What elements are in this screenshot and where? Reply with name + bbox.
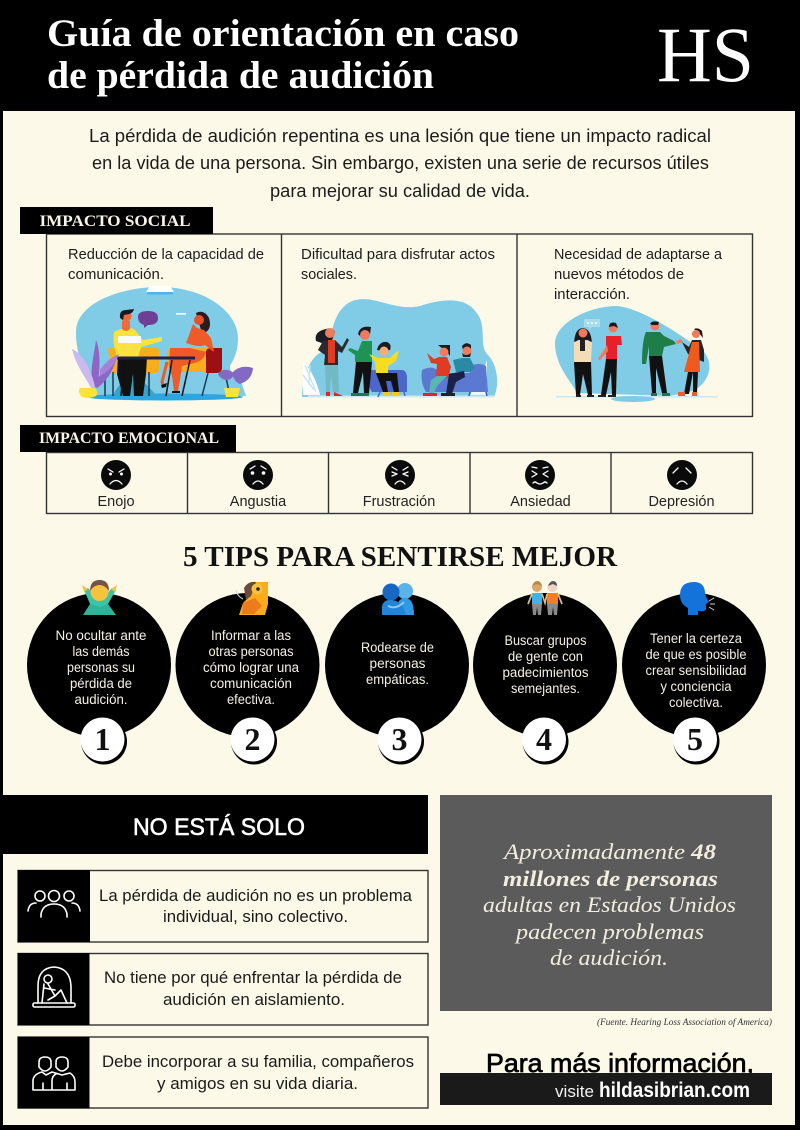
tip 2 [176, 582, 320, 764]
number 5: 5 [687, 721, 703, 757]
number 4 [522, 718, 568, 764]
text: actos sociales: Dificultad para disfrutar actos [301, 247, 495, 263]
illustration: people talking [555, 306, 718, 402]
emotion: angustia [230, 460, 287, 510]
icon: person signing [236, 582, 268, 615]
row: familia y amigos: y amigos en su vida diaria. [157, 1075, 358, 1093]
icon: person at window [33, 967, 75, 1007]
tip 4 [473, 581, 617, 764]
tip 1: personas su [67, 660, 135, 675]
icon: group of people [28, 890, 80, 917]
emotion: ansiedad [510, 460, 571, 510]
heading: impacto social [20, 207, 213, 234]
text: nuevos métodos [554, 247, 723, 303]
emotion: angustia: Angustia [230, 494, 287, 510]
icon: speaking head [680, 582, 715, 615]
text: actos sociales [301, 247, 495, 283]
tip 4: padecimientos [502, 665, 589, 680]
illustration: conversation at table [72, 286, 253, 400]
tip 5: de que es posible [646, 647, 746, 662]
tip 5: crear sensibilidad [646, 663, 746, 678]
tip 2: cómo lograr una [203, 660, 299, 675]
tip 5: colectiva. [669, 695, 723, 710]
row: problema colectivo [18, 870, 428, 942]
tip 1: pérdida de [70, 676, 132, 691]
text: comunicación: comunicación. [68, 267, 164, 283]
row: familia y amigos [18, 1037, 428, 1108]
call to action: Para más información, [486, 1048, 754, 1078]
number 5 [673, 718, 720, 764]
panel: statistic [440, 795, 772, 1011]
tip 2: otras personas [208, 644, 294, 659]
panel: impacto social [20, 207, 752, 416]
call to action: visite [555, 1082, 594, 1101]
title: de pérdida de audición [47, 54, 434, 97]
intro text: La pérdida de audición repentina es una lesión que tiene un impacto radical [89, 125, 711, 146]
icon: two people [33, 1057, 75, 1090]
text: nuevos métodos: nuevos métodos de [554, 267, 684, 283]
call to action: hildasibrian.com [599, 1079, 750, 1102]
panel: statistic: padecen problemas [514, 919, 704, 944]
row: problema colectivo: La pérdida de audición no es un problema [99, 887, 413, 905]
number 1 [80, 718, 127, 764]
tip 3: personas [370, 656, 426, 671]
tip 3: Rodearse de [361, 640, 434, 655]
panel: statistic: Aproximadamente 48 [502, 839, 716, 864]
tip 1 [27, 580, 171, 764]
text: comunicación [68, 247, 264, 283]
icon: people hugging [382, 583, 414, 615]
text: actos sociales: sociales. [301, 267, 357, 283]
text: nuevos métodos: Necesidad de adaptarse a [554, 247, 723, 263]
panel: impacto emocional [20, 425, 752, 514]
call to action [440, 1048, 772, 1105]
row: aislamiento: audición en aislamiento. [163, 991, 345, 1009]
number 3 [378, 718, 424, 764]
tip 5 [622, 582, 766, 764]
icon: person crossing arms [82, 580, 117, 615]
header [47, 11, 754, 98]
logo HS: HS [657, 11, 754, 98]
tip 3 [325, 583, 469, 764]
heading: no está solo [0, 795, 428, 854]
tip 1: las demás [72, 644, 130, 659]
row: aislamiento: No tiene por qué enfrentar la pérdida de [104, 969, 402, 987]
panel: tips [27, 580, 766, 764]
number 1: 1 [94, 721, 110, 757]
tip 3: empáticas. [366, 672, 429, 687]
impacto social table [46, 234, 752, 416]
tip 2: Informar a las [211, 628, 291, 643]
emotion: depresión [648, 460, 715, 510]
emotion: enojo [97, 460, 135, 510]
icon: two people holding hands [528, 581, 562, 615]
emotion: depresión: Depresión [648, 494, 715, 510]
intro text [89, 125, 711, 201]
text: nuevos métodos: interacción. [554, 287, 630, 303]
number 2 [230, 718, 277, 764]
tip 4: semejantes. [511, 681, 580, 696]
number 2: 2 [244, 721, 260, 757]
intro text: para mejorar su calidad de vida. [270, 180, 530, 201]
impacto emocional table [46, 452, 752, 514]
number 3: 3 [392, 721, 408, 757]
intro text: en la vida de una persona. Sin embargo, existen una serie de recursos útiles [92, 152, 709, 173]
row: problema colectivo: individual, sino colectivo. [163, 908, 348, 926]
heading: impacto emocional [20, 425, 236, 452]
tip 2: comunicación [210, 676, 292, 691]
panel: statistic: adultas en Estados Unidos [483, 892, 736, 917]
tip 5: y conciencia [660, 679, 732, 694]
tip 2: efectiva. [227, 692, 275, 707]
panel: statistic: de audición. [550, 945, 668, 970]
tip 1: No ocultar ante [56, 628, 146, 643]
heading: impacto emocional: IMPACTO EMOCIONAL [39, 430, 219, 447]
heading: 5 tips: 5 TIPS PARA SENTIRSE MEJOR [183, 542, 618, 573]
number 4: 4 [536, 721, 552, 757]
text: comunicación: Reducción de la capacidad de [68, 247, 264, 263]
panel: statistic: millones de personas [503, 866, 718, 891]
emotion: enojo: Enojo [97, 494, 135, 510]
row: familia y amigos: Debe incorporar a su familia, compañeros [102, 1053, 414, 1071]
heading: no está solo: NO ESTÁ SOLO [133, 814, 305, 841]
emotion: frustración: Frustración [363, 494, 435, 510]
tip 1: audición. [74, 692, 128, 707]
source note: (Fuente. Hearing Loss Association of America) [597, 1017, 772, 1027]
title: Guía de orientación en caso [47, 12, 519, 55]
title [47, 12, 519, 97]
tip 4: de gente con [508, 649, 583, 664]
emotion: ansiedad: Ansiedad [510, 494, 571, 510]
illustration: group on sofas [302, 299, 497, 398]
panel: no está solo [0, 795, 428, 1108]
tip 4: Buscar grupos [504, 633, 587, 648]
emotion: frustración [363, 460, 435, 510]
row: aislamiento [18, 953, 428, 1025]
tip 5: Tener la certeza [650, 631, 742, 646]
heading: impacto social: IMPACTO SOCIAL [40, 213, 190, 230]
